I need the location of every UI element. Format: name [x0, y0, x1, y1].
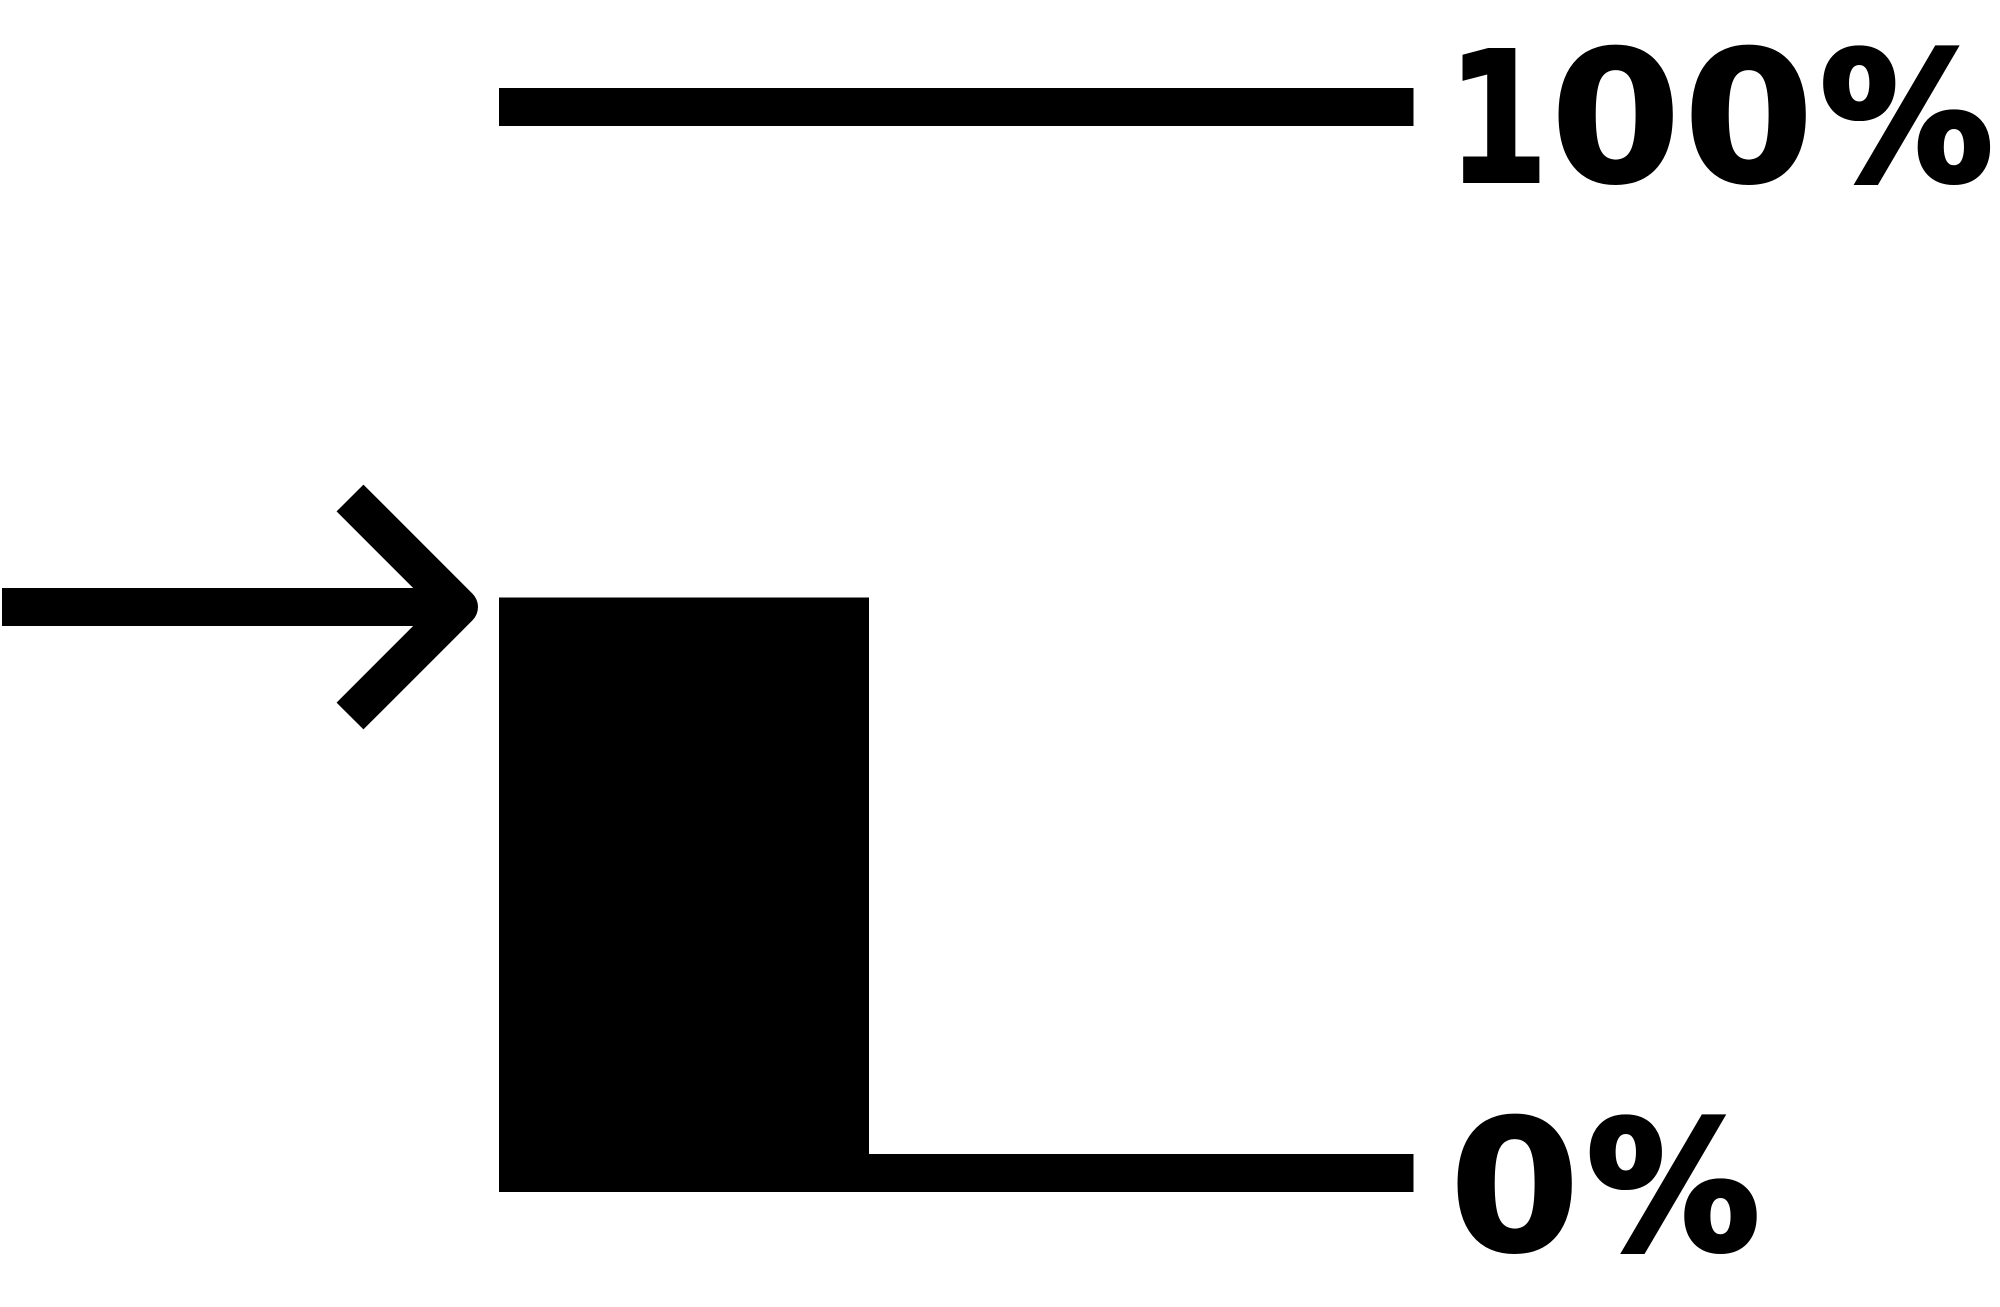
arrow pointing to the bar's level — [2, 498, 459, 716]
bottom line: 0% level — [499, 1154, 1414, 1192]
top line: 100% level — [499, 88, 1414, 126]
filled bar — [499, 598, 869, 1192]
label: 100%: % — [1820, 16, 1993, 223]
label: 100%: 1 — [1447, 14, 1548, 225]
label: 0%: % — [1587, 1085, 1760, 1292]
label: 100% — [1447, 11, 1993, 225]
label: 100%: 0 — [1551, 11, 1681, 225]
label: 0%: 0 — [1450, 1080, 1580, 1294]
label: 100%: 0 — [1684, 11, 1814, 225]
label: 0% — [1450, 1080, 1760, 1294]
